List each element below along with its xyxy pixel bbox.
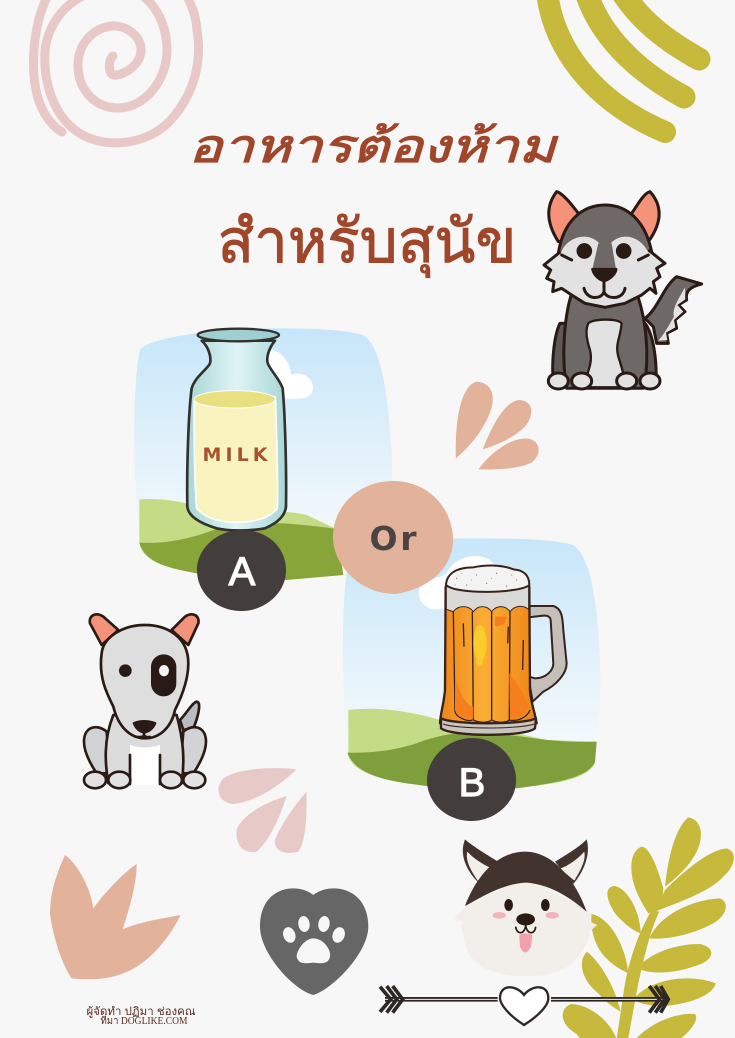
terrier tail (180, 702, 199, 730)
icon: bull terrier dog (84, 614, 206, 788)
panel B: beer scene (343, 538, 600, 788)
wolf head (558, 205, 652, 280)
decoration: pink drops (219, 768, 307, 853)
husky nose and mouth (516, 913, 535, 925)
terrier nose (134, 721, 155, 732)
terrier eye (120, 666, 130, 676)
husky face fur (454, 877, 597, 976)
wolf mouth (562, 255, 648, 298)
husky eyes (504, 899, 513, 911)
wolf hind legs (553, 323, 656, 380)
decoration: pink spiral (33, 0, 199, 143)
badge: A: A (229, 550, 256, 594)
icon: grey wolf dog (544, 192, 702, 389)
wolf eyes (578, 245, 591, 257)
left fletching (380, 986, 403, 1013)
wolf ears (549, 192, 659, 242)
terrier chest (130, 745, 160, 785)
wolf paws (548, 373, 660, 389)
grass B light (348, 709, 597, 788)
cloud A (268, 350, 313, 399)
right fletching (649, 986, 668, 1013)
badge: B (427, 738, 516, 821)
grass B dark (347, 732, 597, 788)
title line 1: อาหารต้องห้าม (188, 120, 559, 172)
terrier head (101, 625, 188, 738)
terrier body (106, 715, 183, 783)
credit text (86, 1006, 196, 1027)
title line 2: สำหรับสุนัข (218, 208, 516, 278)
beer flutes (453, 612, 530, 722)
husky cheeks (493, 912, 506, 919)
credit text: ผู้จัดทำ ปฏิมา ช่องคณ (86, 1006, 196, 1018)
icon: heart with paw (260, 888, 368, 995)
badge: Or (333, 481, 453, 594)
foam speckles (454, 573, 517, 587)
husky tongue (519, 933, 532, 952)
badge: Or: Or (370, 519, 417, 558)
wolf body (564, 293, 647, 388)
wolf tail (645, 277, 702, 343)
panel A: milk scene (134, 328, 392, 580)
wolf muzzle stripe (592, 243, 616, 269)
decoration: olive arcs (547, 0, 699, 132)
icon: husky face (454, 839, 597, 976)
badge: B: B (459, 761, 485, 805)
decoration: olive leaf branch (563, 817, 734, 1038)
sky B (343, 538, 600, 753)
cloud B (419, 556, 501, 609)
wolf nose (593, 269, 616, 281)
arrow with heart (380, 986, 668, 1025)
terrier paws (84, 772, 205, 788)
wolf mane (544, 251, 665, 307)
terrier haunches (84, 727, 206, 773)
decoration: peach flower (50, 855, 181, 979)
decoration: peach drops (456, 382, 539, 470)
grass A dark (139, 523, 343, 580)
grass A light (139, 499, 343, 575)
husky cap (465, 852, 587, 912)
heart (500, 987, 548, 1025)
milk label: MILK (202, 444, 269, 466)
sky A (134, 328, 392, 550)
terrier ears (90, 614, 199, 645)
credit text: ที่มา DOGLIKE.COM (100, 1013, 188, 1027)
husky ears (463, 839, 588, 884)
milk bottle (187, 329, 286, 530)
arrow shaft (385, 992, 663, 1006)
wolf chest (583, 320, 627, 387)
badge: A (197, 530, 286, 611)
terrier eye patch (152, 656, 175, 695)
beer mug (440, 565, 567, 735)
